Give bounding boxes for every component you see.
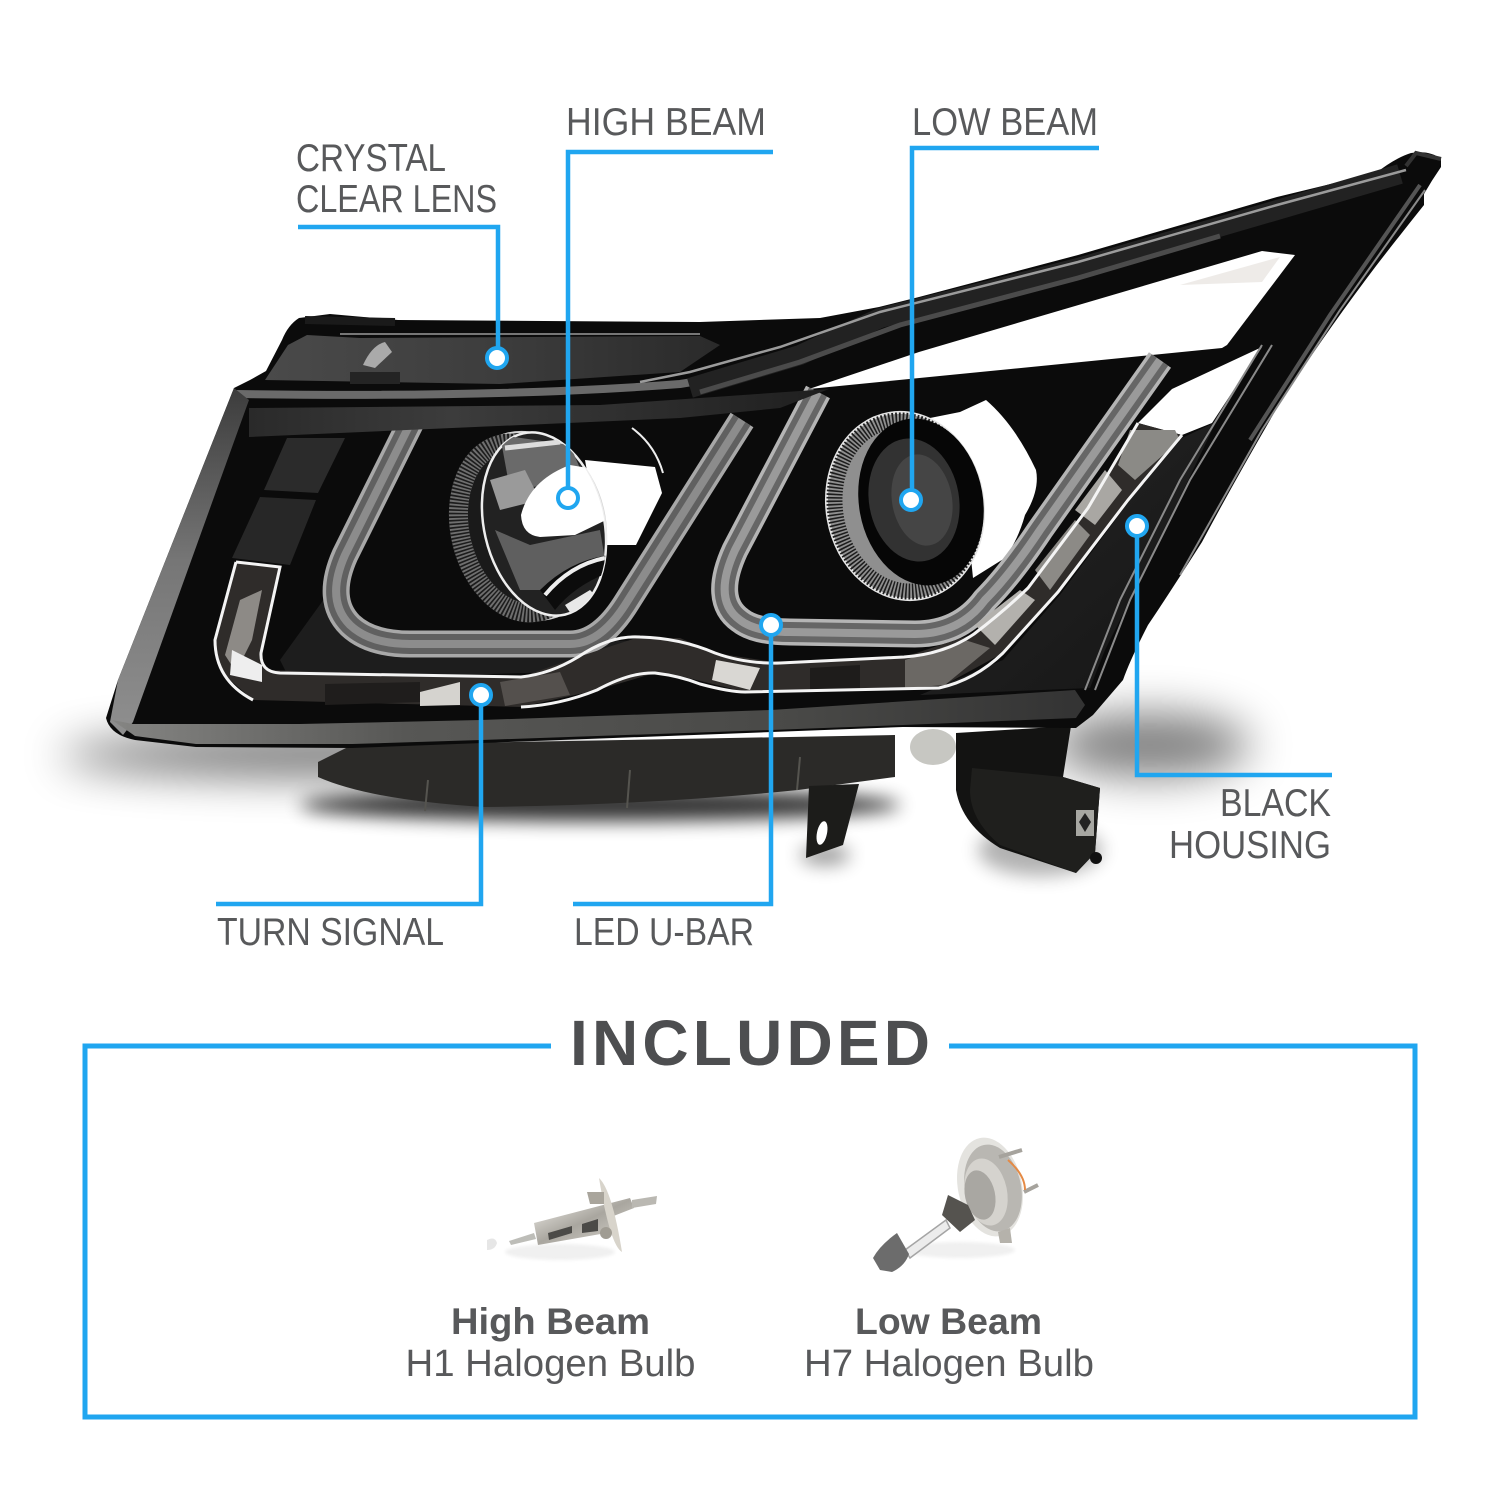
headlight assembly	[60, 152, 1441, 876]
label: high beam bulb: High Beam	[451, 1301, 650, 1342]
callout: turn signal	[216, 685, 491, 954]
inner bezel	[280, 570, 640, 680]
ground shadow	[60, 713, 1250, 876]
label: high beam: HIGH BEAM	[566, 101, 766, 144]
callout: high beam	[558, 101, 773, 508]
housing ribs	[425, 757, 800, 811]
chrome reflector pieces	[225, 430, 1180, 706]
mounting tab	[806, 784, 859, 858]
callout: LED U-bar	[573, 615, 781, 954]
white outlines	[236, 423, 1138, 677]
side bulb socket	[910, 729, 956, 765]
label: low beam bulb: Low Beam	[855, 1301, 1042, 1342]
label: high beam bulb: H1 Halogen Bulb	[406, 1343, 696, 1385]
label: black housing	[1169, 782, 1331, 867]
label: crystal clear lens	[296, 137, 497, 221]
icon: H7 bulb	[873, 1131, 1038, 1272]
lens frame top strip	[236, 322, 880, 395]
lower housing	[318, 735, 895, 807]
icon: H1 bulb	[487, 1178, 657, 1260]
white sliver beside the bar	[1138, 347, 1262, 435]
label: crystal clear lens: CLEAR LENS	[296, 178, 497, 221]
callout: crystal clear lens	[296, 137, 507, 368]
upper clear lens	[265, 320, 720, 384]
heading: included: INCLUDED	[570, 1007, 930, 1079]
wiring connector	[956, 726, 1102, 873]
label: high beam bulb	[406, 1301, 696, 1385]
top band	[249, 389, 829, 437]
turn signal strip	[215, 423, 1182, 707]
tab hole	[815, 820, 829, 846]
high beam projector	[448, 430, 608, 622]
panel: included	[85, 1007, 1415, 1417]
right side panel	[920, 422, 1216, 695]
label: turn signal: TURN SIGNAL	[217, 911, 444, 954]
label: black housing: HOUSING	[1169, 824, 1331, 867]
long top tube	[640, 153, 1441, 392]
white reflection right of high beam	[585, 460, 662, 545]
white reflection behind low beam	[930, 400, 1037, 578]
white window through the housing	[809, 251, 1295, 389]
label: low beam: LOW BEAM	[912, 101, 1098, 144]
callout: low beam	[901, 101, 1099, 510]
main black body silhouette	[106, 152, 1441, 748]
frame left	[110, 388, 249, 735]
right frame lines	[1085, 190, 1425, 690]
callout: black housing	[1127, 516, 1332, 867]
left U-bar	[336, 420, 742, 644]
LED U-bar right	[725, 360, 1160, 634]
frame bottom	[112, 690, 1085, 744]
label: black housing: BLACK	[1220, 782, 1331, 825]
label: LED U-bar: LED U-BAR	[574, 911, 754, 954]
left side slabs	[232, 438, 345, 565]
label: low beam bulb: H7 Halogen Bulb	[804, 1343, 1094, 1385]
label: low beam bulb	[804, 1301, 1094, 1385]
low beam projector	[812, 400, 998, 612]
label: crystal clear lens: CRYSTAL	[296, 137, 446, 180]
